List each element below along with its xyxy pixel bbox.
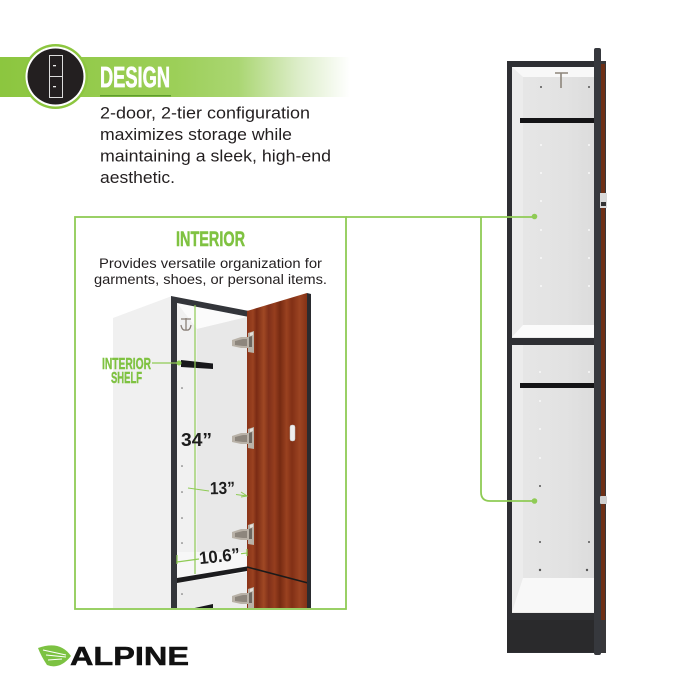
door edge and wood (600, 61, 606, 653)
interior shelf (181, 360, 213, 369)
design icon: locker in circle (23, 44, 88, 109)
connector dot: lower (532, 498, 537, 504)
design description: 2-door, 2-tier configuration (100, 104, 310, 122)
design description: maximizes storage while (100, 125, 292, 144)
width measure line (188, 488, 247, 497)
interior shelf callout: INTERIOR (102, 356, 151, 373)
interior description (94, 256, 327, 287)
logo: alpine: ALPINE (70, 641, 189, 671)
13 inch label: 13” (210, 478, 235, 498)
design banner (0, 57, 350, 97)
10.6 inch label: 10.6” (198, 544, 241, 568)
lower shelf (520, 383, 594, 388)
interior description: garments, shoes, or personal items. (94, 272, 327, 287)
interior description: Provides versatile organization for (99, 256, 323, 271)
interior heading: INTERIOR (176, 228, 245, 251)
hinges (232, 331, 254, 353)
panel: interior detail (75, 217, 346, 609)
door latch (290, 425, 295, 441)
upper compartment (512, 67, 594, 338)
height measure line (194, 305, 196, 574)
design description: aesthetic. (100, 168, 175, 187)
design description: maintaining a sleek, high-end (100, 146, 331, 166)
depth measure line (177, 549, 247, 564)
upper hook (555, 73, 568, 88)
hook (181, 318, 191, 330)
design description (100, 104, 331, 187)
connector lines to locker (346, 217, 534, 501)
design heading: DESIGN (100, 62, 170, 94)
lower compartment (512, 345, 594, 613)
locker photo: open upper door (113, 293, 311, 609)
logo: alpine (38, 641, 189, 671)
upper shelf (520, 118, 594, 123)
34 inch label: 34” (181, 430, 212, 450)
interior shelf callout (102, 356, 182, 387)
full locker photo (507, 48, 607, 655)
connector dot: upper (532, 214, 537, 219)
interior shelf callout: SHELF (111, 370, 142, 387)
latches (600, 193, 607, 208)
